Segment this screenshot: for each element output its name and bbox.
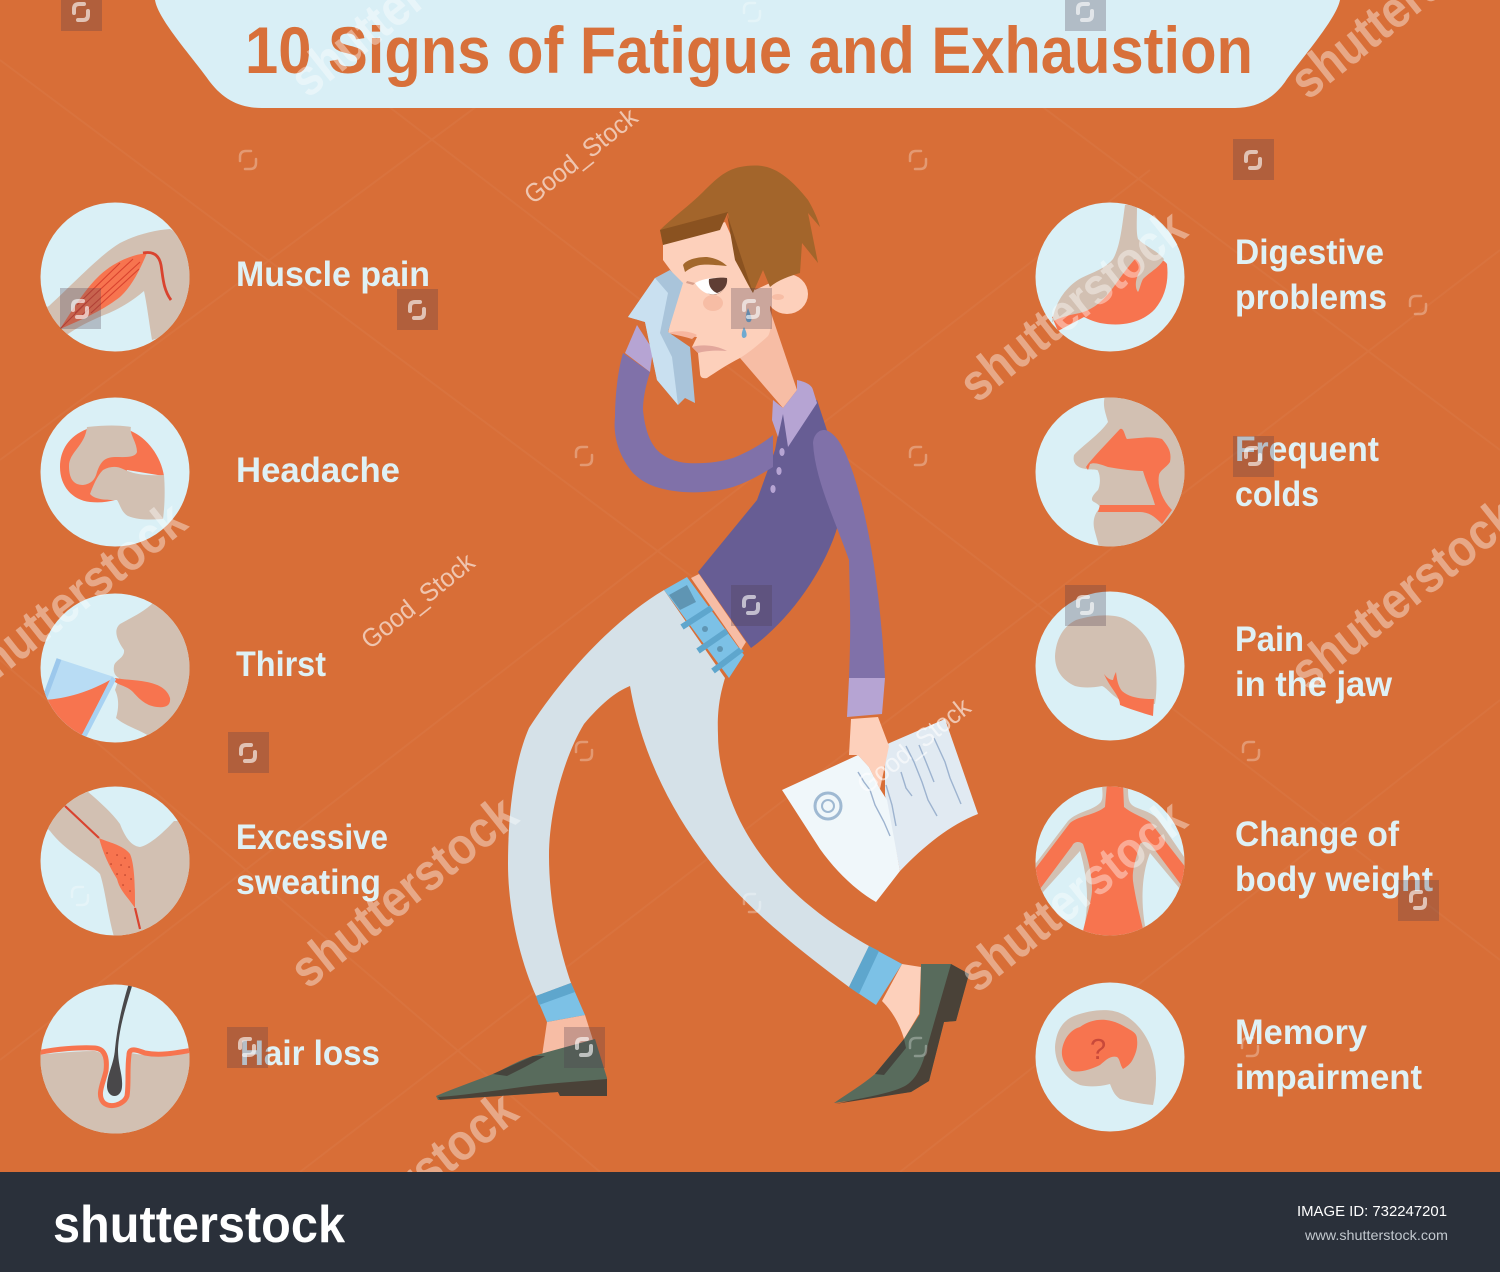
icon: muscle pain bbox=[40, 202, 190, 352]
watermark: shutterstock lower right: shutterstock bbox=[948, 789, 1197, 1003]
title: 10 Signs of Fatigue and Exhaustion bbox=[245, 13, 1253, 87]
image id: IMAGE ID: 732247201 bbox=[1297, 1203, 1447, 1220]
man: shirt collar bbox=[772, 380, 817, 447]
man: right trouser cuff bbox=[849, 946, 902, 1005]
title banner bbox=[155, 0, 1340, 108]
man: facial features bbox=[668, 257, 727, 353]
footer bar bbox=[0, 1172, 1500, 1272]
man: belt bbox=[664, 577, 744, 678]
man: left ankle bbox=[542, 1015, 593, 1056]
man: document stamp bbox=[815, 793, 841, 819]
label: thirst: Thirst bbox=[236, 645, 326, 684]
man: hanging arm bbox=[813, 430, 885, 678]
icon: change of body weight bbox=[1036, 786, 1184, 936]
label: body weight: body weight bbox=[1235, 860, 1433, 899]
icon: hair loss bbox=[37, 983, 193, 1139]
man: document text lines bbox=[858, 738, 961, 836]
watermark: good stock paper: Good_Stock bbox=[851, 691, 977, 800]
label: pain: Pain bbox=[1235, 620, 1304, 659]
man: hand bbox=[849, 717, 889, 789]
man: towel bbox=[628, 270, 695, 405]
man: neck bbox=[740, 310, 797, 408]
man: shirt buttons bbox=[770, 448, 785, 493]
label: sweating: sweating bbox=[236, 863, 381, 902]
man: hair fringe shadow bbox=[660, 212, 753, 293]
tired man illustration bbox=[436, 166, 978, 1104]
man: right shoe bbox=[834, 964, 969, 1104]
label: frequent: Frequent bbox=[1235, 430, 1379, 469]
icon: frequent colds bbox=[1036, 398, 1184, 546]
man: face bbox=[663, 222, 771, 378]
label: in the jaw: in the jaw bbox=[1235, 665, 1393, 704]
man: left shoe bbox=[436, 1039, 607, 1100]
man: document front page bbox=[782, 755, 900, 902]
label: excessive sweating: Excessive bbox=[236, 818, 388, 857]
footer logo: shutterstock bbox=[53, 1196, 345, 1254]
watermark: shutterstock upper right: shutterstock bbox=[948, 199, 1197, 413]
man: torso shirt bbox=[698, 400, 840, 648]
label: hair loss: Hair loss bbox=[240, 1034, 380, 1073]
icon: thirst bbox=[40, 594, 190, 742]
icon: headache bbox=[40, 398, 190, 546]
icon: excessive sweating bbox=[40, 786, 200, 937]
label: impairment: impairment bbox=[1235, 1058, 1422, 1097]
man: left trouser cuff bbox=[536, 983, 585, 1022]
man: waist skin bbox=[691, 574, 746, 650]
watermark marks bbox=[60, 0, 1439, 1068]
man: hanging arm cuff bbox=[847, 678, 885, 717]
man: raised arm bbox=[615, 353, 773, 492]
man: right foot skin bbox=[882, 964, 921, 1039]
label: memory: Memory bbox=[1235, 1013, 1368, 1052]
watermark: good stock left: Good_Stock bbox=[355, 546, 481, 655]
man: teardrops bbox=[742, 308, 751, 338]
website: www.shutterstock.com bbox=[1304, 1227, 1448, 1243]
watermark: good stock top: Good_Stock bbox=[518, 101, 644, 210]
man: hair bbox=[660, 166, 820, 293]
man: trousers bbox=[508, 590, 869, 996]
label: colds: colds bbox=[1235, 475, 1319, 514]
label: headache: Headache bbox=[236, 451, 400, 490]
label: digestive: Digestive bbox=[1235, 233, 1384, 272]
man: raised arm cuff bbox=[625, 325, 653, 372]
watermark: shutterstock centre left: shutterstock bbox=[279, 785, 528, 999]
man: document back page bbox=[885, 719, 978, 871]
label: muscle pain: Muscle pain bbox=[236, 255, 430, 294]
label: problems: problems bbox=[1235, 278, 1387, 317]
label: change of: Change of bbox=[1235, 815, 1399, 854]
icon: pain in the jaw bbox=[1036, 592, 1184, 740]
icon: digestive problems bbox=[1036, 202, 1184, 352]
icon: memory impairment bbox=[1036, 982, 1184, 1132]
man: ear bbox=[766, 274, 808, 314]
icon: memory impairment: ? bbox=[1090, 1034, 1106, 1066]
